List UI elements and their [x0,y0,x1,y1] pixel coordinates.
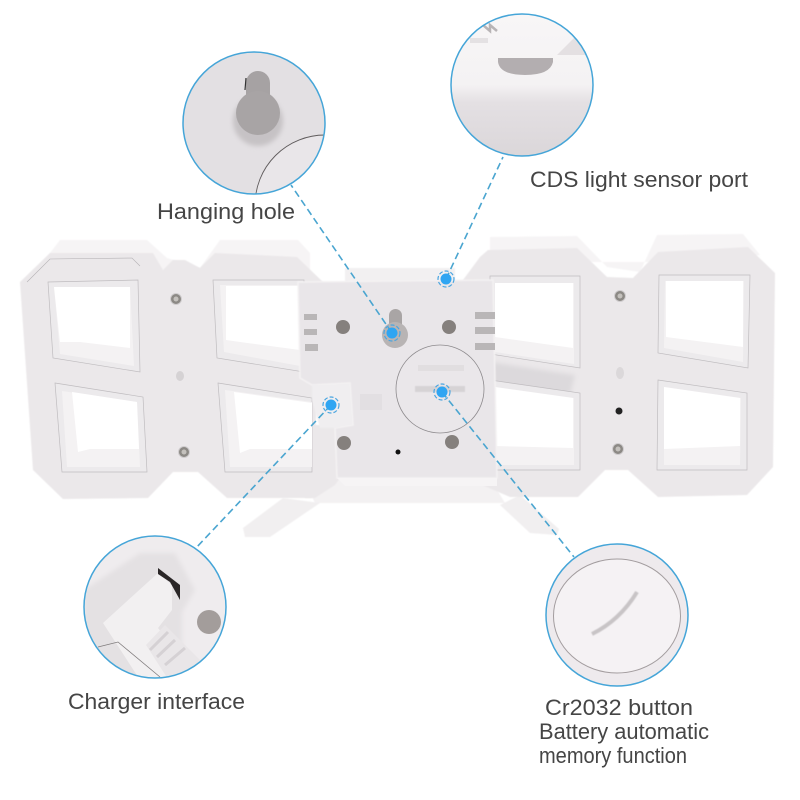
label: light sensor: CDS light sensor port [530,167,748,192]
dashed connector: light sensor [446,157,503,279]
back plate small marks [360,394,382,410]
label: battery: Battery automatic [539,719,709,744]
battery cover [396,345,484,433]
dashed connector: battery [442,392,574,557]
callout circle: charger [83,535,227,679]
keyhole [382,309,408,348]
marker: hanging hole [384,325,400,341]
clock body right digit [463,234,775,497]
window frames left [48,280,312,472]
label: battery: memory function [539,743,687,768]
vent slots [304,312,495,351]
label: charger: Charger interface [68,689,245,714]
marker: battery [434,384,450,400]
mounting holes [336,320,459,454]
marker: charger [323,397,339,413]
label: hanging hole: Hanging hole [157,199,295,224]
callout circle: hanging hole [182,51,326,195]
clock body left digit [20,240,340,499]
label: battery [539,695,709,768]
clock stand [243,478,559,537]
back plate [298,268,497,486]
callout circle: battery cover [545,543,689,687]
callout circle: light sensor [450,12,596,158]
window frames right [490,275,750,470]
marker: light sensor [438,271,454,287]
dashed connector: hanging hole [291,185,392,333]
label: battery: Cr2032 button [545,695,693,720]
clock screws and pinholes [170,290,626,458]
dashed connector: charger [195,405,331,549]
